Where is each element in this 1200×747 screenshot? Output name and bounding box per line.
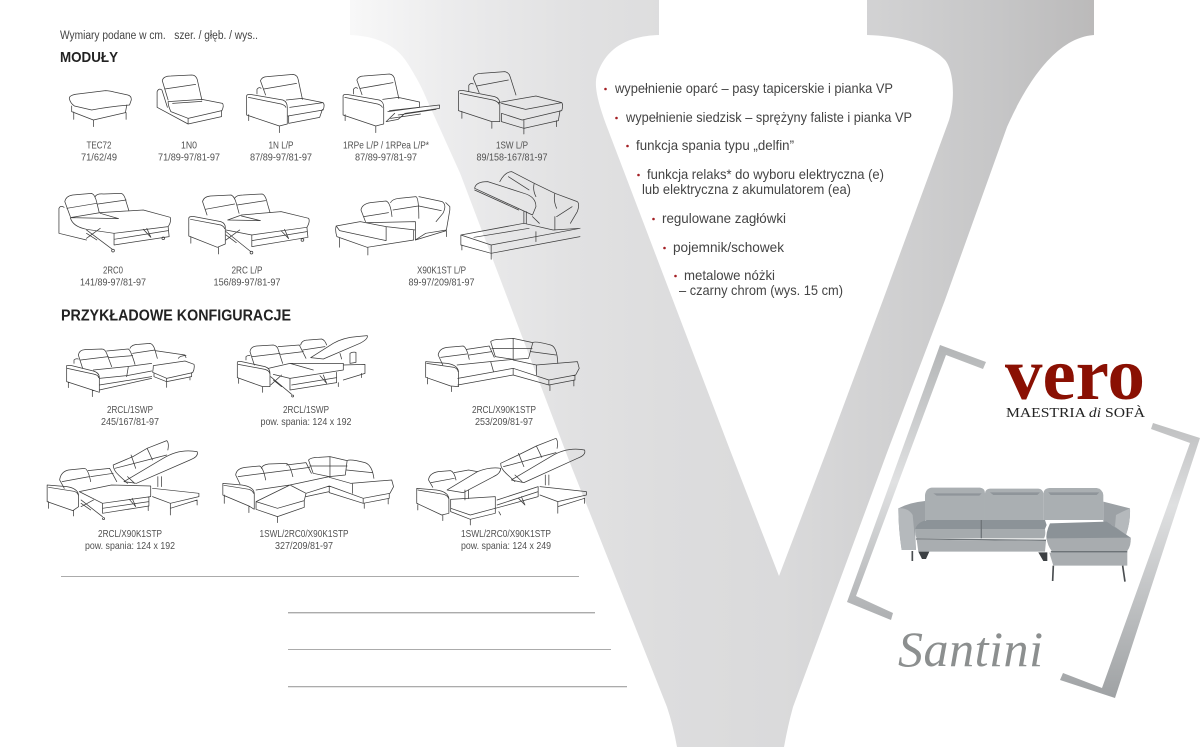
feature: relax function: lub elektryczna z akumulatorem (ea) bbox=[642, 181, 851, 197]
label: 2RC0: 2RC0 bbox=[103, 264, 123, 276]
feature: seat filling: wypełnienie siedzisk – sprężyny faliste i pianka VP bbox=[625, 109, 912, 125]
feature: metal legs: metalowe nóżki bbox=[684, 267, 775, 283]
label: X90K1ST L/P bbox=[408, 264, 475, 288]
icon: X90K1ST L/P bbox=[336, 197, 450, 255]
feature: sleeping function: funkcja spania typu „delfin” bbox=[636, 137, 794, 153]
icon: 1SWL/2RC0/X90K1STP with lifts bbox=[417, 438, 586, 525]
logo: vero: vero bbox=[1005, 334, 1145, 416]
label: TEC72: 71/62/49 bbox=[81, 152, 117, 164]
label: 1SW L/P: 89/158-167/81-97 bbox=[476, 152, 548, 164]
frame bracket right bbox=[1060, 423, 1200, 698]
heading: example configurations: PRZYKŁADOWE KONFIGURACJE bbox=[61, 308, 291, 324]
note lines bbox=[61, 576, 627, 687]
label: 1SWL/2RC0/X90K1STP dimensions: 1SWL/2RC0/X90K1STP bbox=[260, 528, 348, 540]
label: 2RCL/1SWP dimensions: 2RCL/1SWP bbox=[107, 404, 153, 416]
label: 1SWL/2RC0/X90K1STP sleeping area: pow. spania: 124 x 249 bbox=[461, 540, 551, 552]
label: 1N0: 1N0 bbox=[181, 140, 197, 152]
label: 2RC L/P bbox=[214, 264, 281, 288]
label: 2RC L/P: 2RC L/P bbox=[232, 264, 262, 276]
label: 1SWL/2RC0/X90K1STP dimensions bbox=[260, 528, 348, 552]
feature: storage: pojemnik/schowek bbox=[673, 239, 785, 255]
icon: 2RCL/1SWP with bed bbox=[237, 336, 367, 397]
icon: X90K1ST with lifted seat bbox=[461, 172, 580, 259]
feature: adjustable headrests: regulowane zagłówki bbox=[662, 210, 786, 226]
icon: 1N0 bbox=[157, 75, 223, 124]
icon: 1SW L/P bbox=[458, 72, 563, 134]
feature list bbox=[604, 80, 912, 298]
label: 2RCL/X90K1STP dimensions bbox=[472, 404, 536, 428]
label: 2RCL/1SWP sleeping area bbox=[260, 404, 352, 428]
label: 1N0: 71/89-97/81-97 bbox=[158, 152, 220, 164]
label: 1RPe L/P: 1RPe L/P / 1RPea L/P* bbox=[343, 140, 429, 152]
sofa photo bbox=[898, 488, 1131, 582]
feature: relax function: funkcja relaks* do wyboru elektryczna (e) bbox=[647, 166, 884, 182]
label: 2RCL/X90K1STP sleeping area: 2RCL/X90K1STP bbox=[98, 528, 162, 540]
label: 2RC0 bbox=[80, 264, 146, 288]
label: 2RCL/X90K1STP sleeping area bbox=[85, 528, 175, 552]
logo: vero: MAESTRIA di SOFÀ bbox=[1006, 405, 1145, 420]
label: 2RCL/1SWP dimensions bbox=[101, 404, 159, 428]
configuration line drawings bbox=[47, 338, 586, 525]
label: 2RCL/X90K1STP dimensions: 2RCL/X90K1STP bbox=[472, 404, 536, 416]
label: 1N L/P: 87/89-97/81-97 bbox=[250, 152, 312, 164]
label: 1SWL/2RC0/X90K1STP sleeping area bbox=[461, 528, 551, 552]
label: X90K1ST L/P: 89-97/209/81-97 bbox=[408, 276, 475, 288]
icon: 1N L/P bbox=[247, 74, 324, 133]
label: X90K1ST L/P: X90K1ST L/P bbox=[417, 264, 466, 276]
module line drawings bbox=[59, 72, 580, 259]
label: 1SWL/2RC0/X90K1STP dimensions: 327/209/81-97 bbox=[275, 540, 333, 552]
icon: 2RCL/X90K1STP with lifts bbox=[47, 441, 199, 520]
icon: 2RC L/P bbox=[189, 194, 309, 254]
label: 1N L/P: 1N L/P bbox=[268, 140, 294, 152]
feature: back filling: wypełnienie oparć – pasy tapicerskie i pianka VP bbox=[614, 80, 893, 96]
label: 2RCL/1SWP sleeping area: pow. spania: 124 x 192 bbox=[260, 416, 352, 428]
label: 2RCL/X90K1STP dimensions: 253/209/81-97 bbox=[475, 416, 533, 428]
label: TEC72 bbox=[81, 140, 117, 164]
label: 2RCL/1SWP dimensions: 245/167/81-97 bbox=[101, 416, 159, 428]
measurement note: Wymiary podane w cm. szer. / głęb. / wys.. bbox=[60, 30, 258, 42]
label: 1RPe L/P bbox=[343, 140, 429, 164]
label: 1RPe L/P: 87/89-97/81-97 bbox=[355, 152, 417, 164]
feature: relax function bbox=[637, 166, 884, 197]
label: 1SW L/P bbox=[476, 140, 548, 164]
icon: 2RCL/X90K1STP bbox=[426, 338, 579, 392]
icon: 2RC0 bbox=[59, 193, 171, 252]
feature: metal legs: – czarny chrom (wys. 15 cm) bbox=[679, 282, 843, 298]
label: 1SW L/P: 1SW L/P bbox=[496, 140, 528, 152]
configuration labels bbox=[85, 404, 551, 552]
heading: modules: MODUŁY bbox=[60, 49, 118, 66]
icon: 1RPe L/P bbox=[343, 74, 440, 133]
label: 2RC L/P: 156/89-97/81-97 bbox=[214, 276, 281, 288]
big letter V background bbox=[350, 0, 1094, 747]
label: 2RC0: 141/89-97/81-97 bbox=[80, 276, 146, 288]
label: 2RCL/1SWP sleeping area: 2RCL/1SWP bbox=[283, 404, 329, 416]
label: 1N0 bbox=[158, 140, 220, 164]
label: TEC72: TEC72 bbox=[86, 140, 112, 152]
feature: metal legs bbox=[674, 267, 843, 298]
module labels bbox=[80, 140, 548, 288]
icon: 2RCL/1SWP bbox=[67, 343, 194, 397]
label: 1SWL/2RC0/X90K1STP sleeping area: 1SWL/2RC0/X90K1STP bbox=[461, 528, 551, 540]
icon: TEC72 bbox=[69, 91, 131, 127]
model name: Santini bbox=[898, 621, 1043, 677]
label: 1N L/P bbox=[250, 140, 312, 164]
label: 2RCL/X90K1STP sleeping area: pow. spania: 124 x 192 bbox=[85, 540, 175, 552]
icon: 1SWL/2RC0/X90K1STP bbox=[223, 457, 394, 523]
frame bracket left bbox=[847, 345, 986, 620]
